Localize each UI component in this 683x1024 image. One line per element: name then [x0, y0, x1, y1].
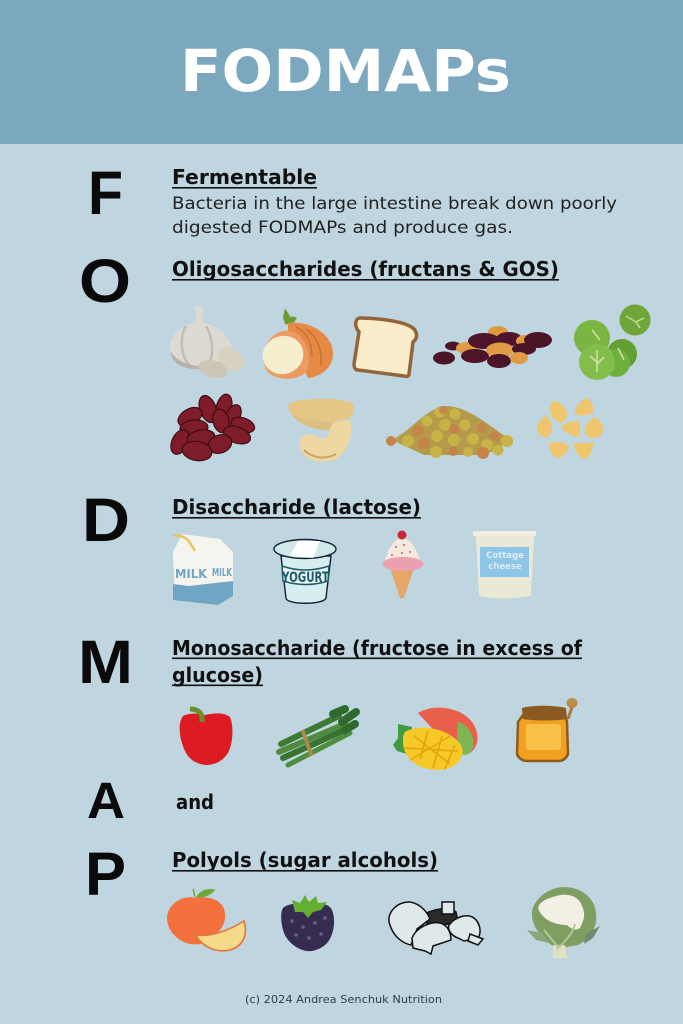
- header band with title: [0, 0, 683, 144]
- icon: chickpeas: [537, 398, 603, 459]
- icon: blackberry: [281, 895, 334, 951]
- section: Fermentable: [172, 165, 617, 238]
- icon: mushrooms: [389, 902, 483, 954]
- section: Fermentable: digested FODMAPs and produce gas.: [172, 218, 513, 238]
- icon: cashews: [288, 399, 354, 462]
- header band with title: FODMAPs: [180, 37, 511, 105]
- icon: asparagus bundle: [279, 709, 356, 765]
- icon: cottage cheese tub: [473, 531, 536, 598]
- letter P: P: [85, 840, 126, 908]
- letter M: M: [78, 628, 133, 696]
- icon: milk carton: MILK: [212, 566, 232, 579]
- icon: cottage cheese tub: Cottage: [486, 551, 524, 561]
- icon: onion: [257, 308, 333, 380]
- icon: kidney beans: [167, 393, 257, 463]
- icon: brussels sprouts: [574, 304, 650, 380]
- letter D: D: [82, 486, 130, 554]
- section: Fermentable: Fermentable: [172, 165, 317, 189]
- icon: red bell pepper: [180, 709, 232, 765]
- heading: Oligosaccharides: Oligosaccharides (fructans & GOS): [172, 257, 559, 281]
- word: and: and: [176, 790, 214, 814]
- heading: Monosaccharide: glucose): [172, 663, 263, 687]
- icon: yogurt cup: [274, 540, 336, 603]
- heading: Polyols: Polyols (sugar alcohols): [172, 848, 438, 872]
- icon: lentil pile: [386, 406, 513, 459]
- icon: yogurt cup: YOGURT: [281, 570, 329, 586]
- letter A: A: [87, 772, 125, 829]
- heading: Monosaccharide: [172, 636, 582, 687]
- heading: Monosaccharide: Monosaccharide (fructose in excess of: [172, 636, 582, 660]
- icon: cauliflower: [527, 887, 600, 958]
- icon: raisins: [433, 326, 552, 368]
- icon: garlic: [170, 305, 249, 381]
- icon: milk carton: [173, 534, 233, 605]
- icon: bread: [354, 318, 417, 376]
- section: Fermentable: Bacteria in the large intestine break down poorly: [172, 194, 617, 214]
- icon: mango: [393, 708, 477, 770]
- icon: ice cream cone: [382, 530, 424, 598]
- letter F: F: [88, 159, 123, 227]
- footer credit: (c) 2024 Andrea Senchuk Nutrition: [245, 993, 442, 1006]
- letter O: O: [79, 247, 131, 315]
- icon: honey jar: [517, 698, 578, 761]
- icon: milk carton: MILK: [175, 567, 208, 581]
- heading: Disaccharide: Disaccharide (lactose): [172, 495, 421, 519]
- icon: cottage cheese tub: cheese: [488, 562, 522, 572]
- icon: peach: [167, 889, 245, 951]
